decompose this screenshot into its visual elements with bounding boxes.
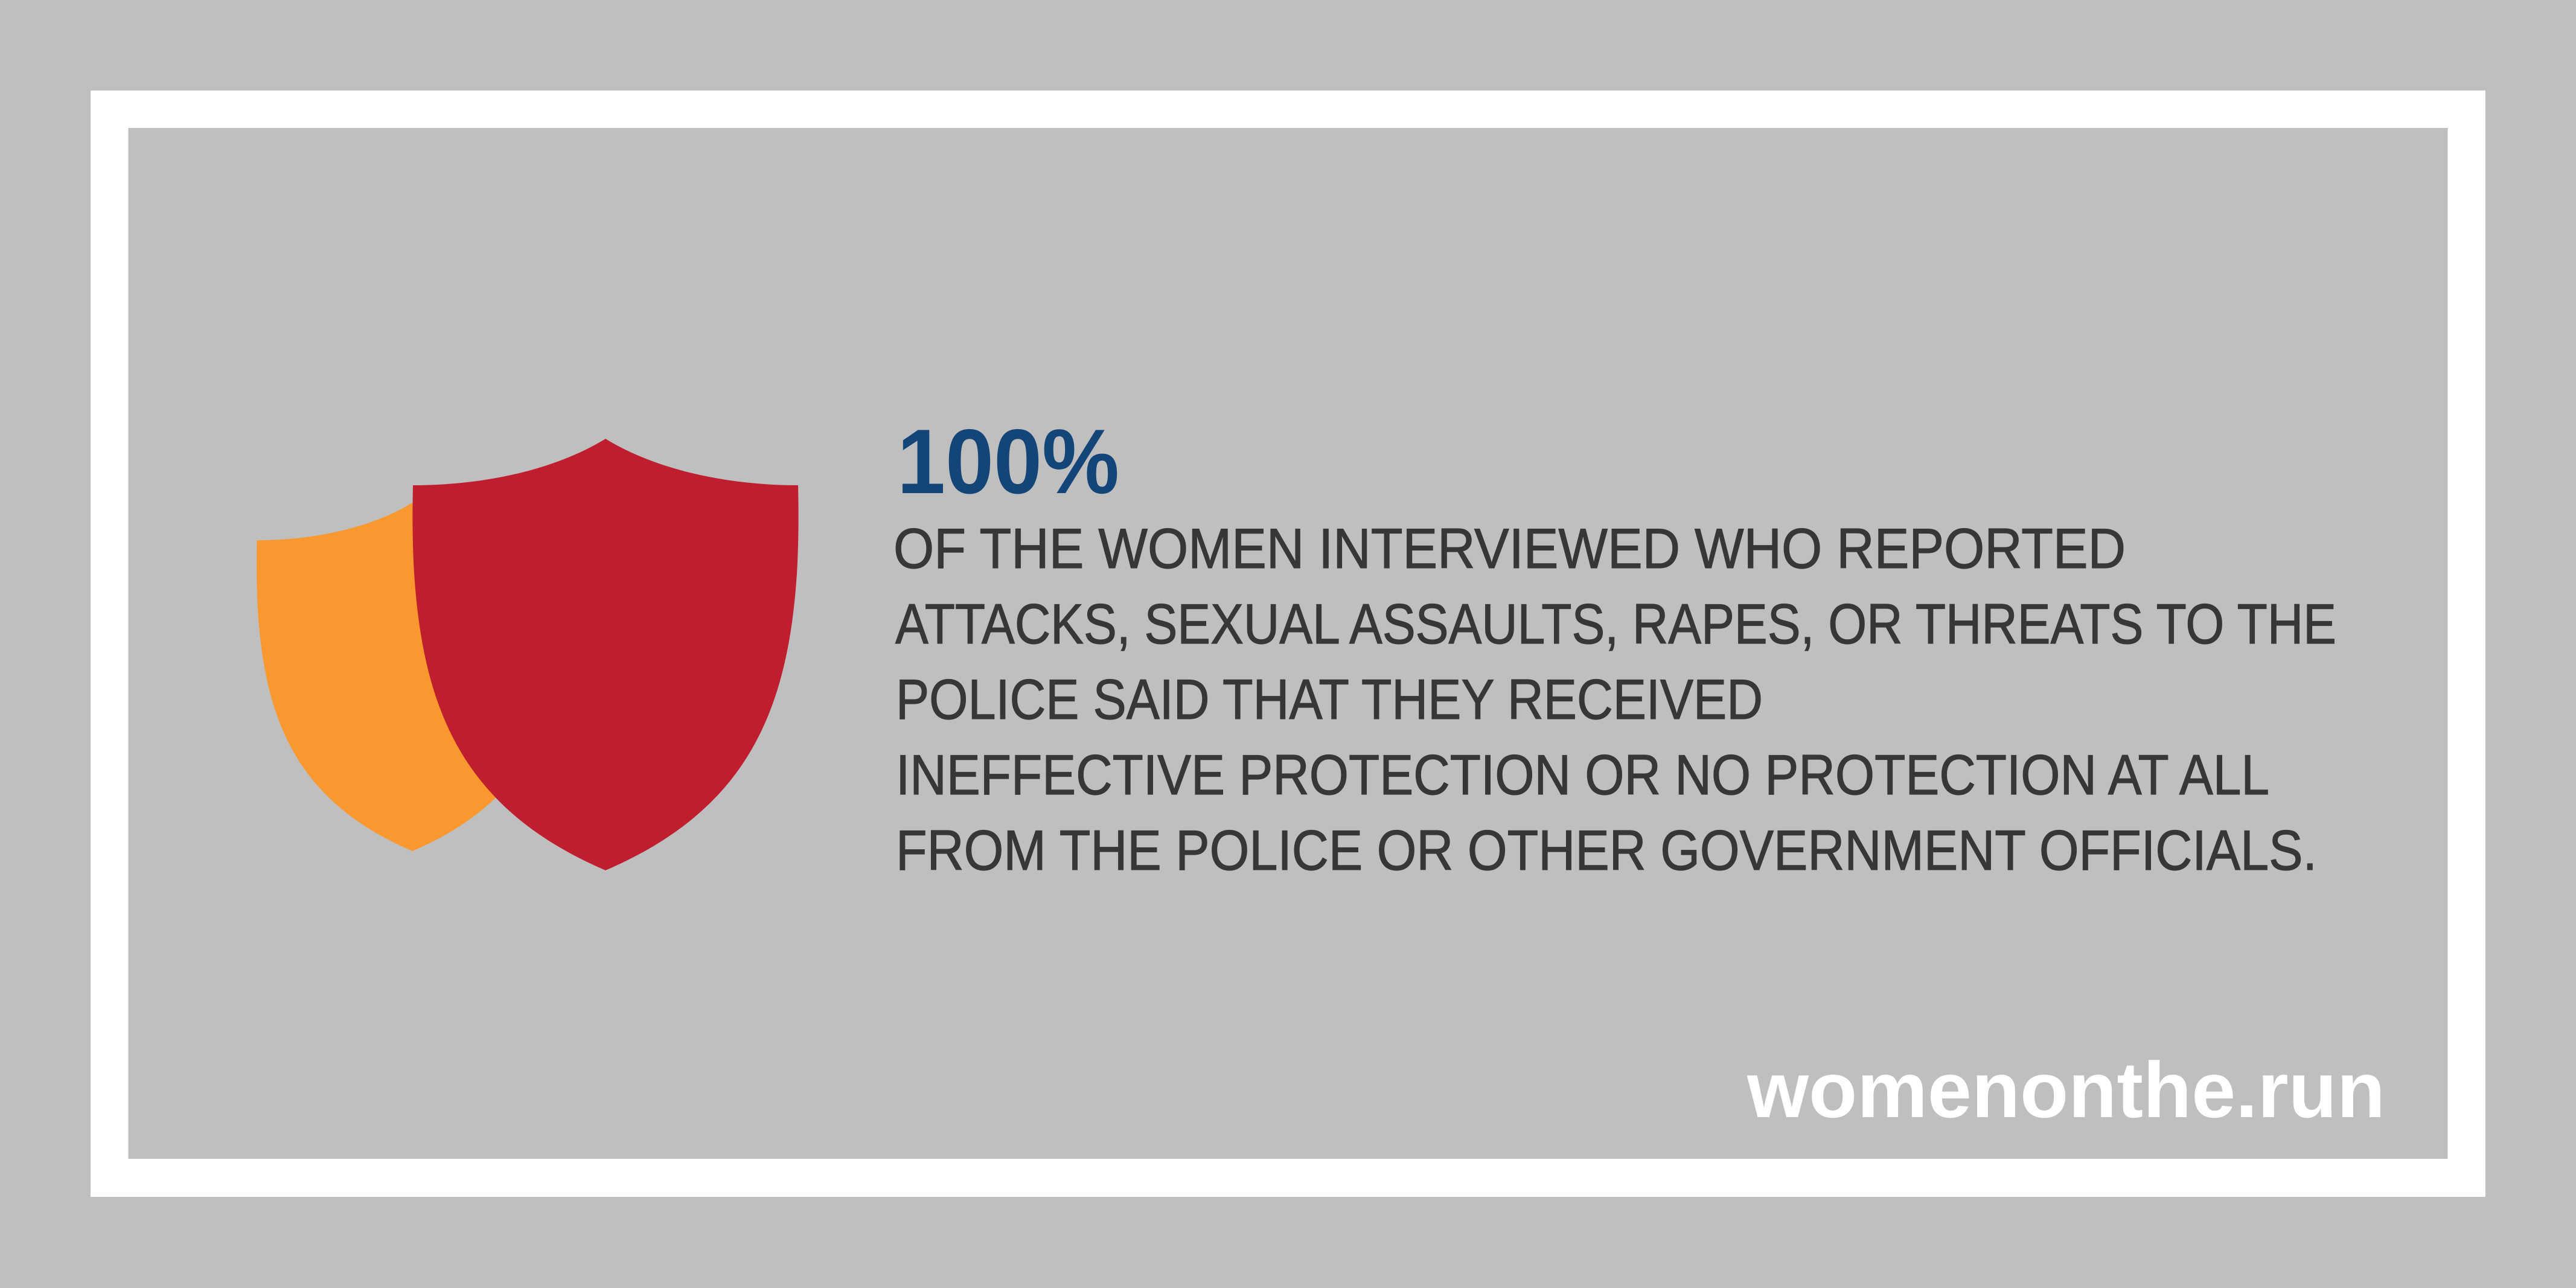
icon: red shield xyxy=(412,439,799,870)
body text: OF THE WOMEN INTERVIEWED WHO REPORTED xyxy=(893,517,2126,580)
body text: FROM THE POLICE OR OTHER GOVERNMENT OFFICIALS. xyxy=(896,818,2317,882)
icon: orange shield xyxy=(257,503,568,851)
body text: POLICE SAID THAT THEY RECEIVED xyxy=(896,668,1763,731)
icon: overlapping shields xyxy=(257,439,799,870)
website url: womenonthe.run xyxy=(1747,1045,2385,1134)
body text: INEFFECTIVE PROTECTION OR NO PROTECTION AT ALL xyxy=(896,743,2269,806)
headline statistic: 100% xyxy=(897,410,1119,513)
body text xyxy=(893,517,2336,882)
body text: ATTACKS, SEXUAL ASSAULTS, RAPES, OR THREATS TO THE xyxy=(895,592,2336,655)
white frame xyxy=(91,91,2485,1197)
